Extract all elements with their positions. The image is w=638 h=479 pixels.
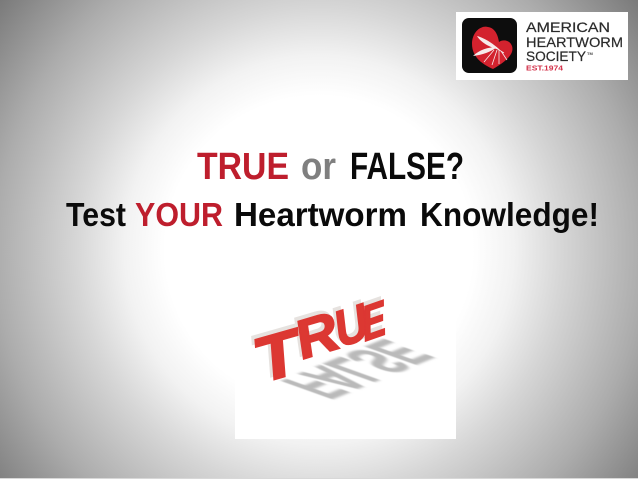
subtitle: Test YOUR Heartworm Knowledge!: [66, 197, 599, 234]
icon: heart with mosquito: [462, 18, 517, 73]
logo wordmark: EST.1974: [526, 66, 563, 72]
letters: TRUE: [254, 289, 386, 398]
subtitle: Test YOUR Heartworm Knowledge!: YOUR: [135, 197, 223, 234]
letters: white and grey extrusion: T: [251, 311, 299, 395]
logo wordmark: TM: [587, 51, 593, 56]
letters: TRUE: T: [254, 314, 302, 398]
letters: white and grey extrusion: [251, 286, 383, 395]
letters: TRUE: U: [333, 293, 371, 359]
logo wordmark: SOCIETY: [526, 48, 587, 64]
letters: TRUE: R: [293, 300, 342, 372]
letters: white and grey extrusion: R: [290, 297, 339, 369]
subtitle: Test YOUR Heartworm Knowledge!: Test: [66, 197, 126, 234]
title: TRUE or FALSE?: or: [301, 146, 336, 188]
logo wordmark: [526, 19, 623, 72]
letters: TRUE: E: [362, 289, 386, 353]
title: TRUE or FALSE?: FALSE?: [350, 146, 464, 188]
bottom edge line: [0, 478, 638, 479]
logo wordmark: HEARTWORM: [526, 34, 623, 50]
shadow: FALSE: FALSE: [264, 333, 451, 405]
letters: white and grey extrusion: E: [359, 286, 383, 350]
letters: white and grey extrusion: U: [330, 290, 368, 356]
title: TRUE or FALSE?: TRUE: [197, 146, 289, 188]
subtitle: Test YOUR Heartworm Knowledge!: Knowledge!: [420, 197, 599, 234]
logo wordmark: AMERICAN: [526, 19, 610, 35]
image: TRUE 3D letters with FALSE shadow: [235, 272, 456, 439]
subtitle: Test YOUR Heartworm Knowledge!: Heartworm: [234, 197, 407, 234]
logo: American Heartworm Society: [456, 12, 628, 80]
title: TRUE or FALSE?: [197, 146, 464, 188]
